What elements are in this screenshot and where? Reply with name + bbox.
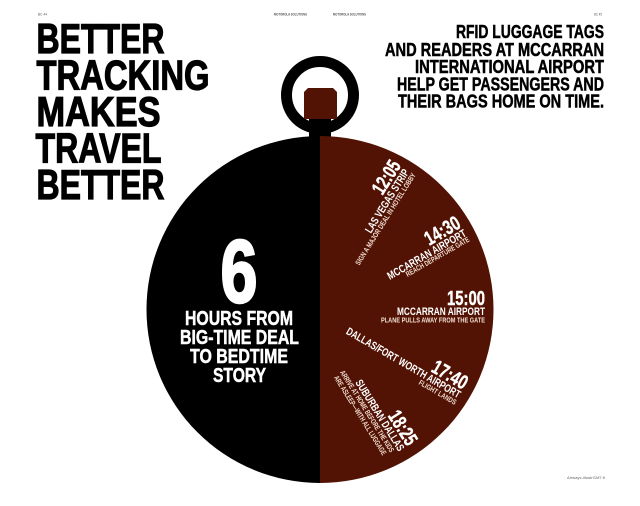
event 18:25: SUBURBAN DALLAS bbox=[353, 378, 406, 454]
event 15:00: PLANE PULLS AWAY FROM THE GATE bbox=[381, 316, 485, 324]
page header: BC 44 bbox=[38, 12, 47, 16]
stopwatch crown bbox=[304, 88, 337, 119]
callout text: STORY bbox=[213, 365, 267, 387]
subtitle: INTERNATIONAL AIRPORT bbox=[415, 57, 604, 77]
event 18:25 bbox=[332, 369, 421, 457]
callout text bbox=[180, 308, 299, 387]
callout text: HOURS FROM bbox=[185, 308, 293, 330]
event 12:05: LAS VEGAS STRIP bbox=[363, 167, 412, 235]
page header bbox=[38, 12, 602, 16]
event 14:30: 14:30 bbox=[421, 212, 464, 250]
title: TRACKING bbox=[36, 52, 210, 98]
callout text: BIG-TIME DEAL bbox=[180, 327, 299, 349]
event 15:00 bbox=[381, 288, 485, 324]
event 12:05 bbox=[353, 156, 418, 267]
event 18:25: 18:25 bbox=[383, 407, 421, 450]
subtitle bbox=[385, 22, 604, 112]
event 18:25: ARRIVE AT HOME BEFORE THE KIDS bbox=[338, 369, 396, 454]
title: MAKES bbox=[36, 88, 160, 135]
title: TRAVEL bbox=[36, 124, 162, 172]
event 14:30: MCCARRAN AIRPORT bbox=[385, 228, 469, 283]
stopwatch ring bbox=[286, 62, 354, 128]
six hours callout bbox=[180, 221, 299, 387]
stopwatch bbox=[146, 62, 494, 483]
page header: MOTOROLA SOLUTIONS bbox=[274, 12, 308, 16]
stopwatch stem bbox=[309, 117, 331, 141]
event 17:40: DALLAS/FORT WORTH AIRPORT bbox=[344, 326, 463, 401]
event 12:05: SIGN A MAJOR DEAL IN HOTEL LOBBY bbox=[353, 171, 418, 267]
title bbox=[36, 15, 210, 208]
dial left half bbox=[146, 136, 320, 483]
photo credit: Airways.iIlustrGM7.fi bbox=[567, 476, 605, 480]
event 15:00: MCCARRAN AIRPORT bbox=[397, 306, 485, 318]
event 15:00: 15:00 bbox=[447, 288, 485, 310]
title: BETTER bbox=[36, 161, 164, 208]
page header: BC 45 bbox=[594, 12, 602, 16]
event 17:40: FLIGHT LANDS bbox=[417, 378, 458, 407]
page header: MOTOROLA SOLUTIONS bbox=[333, 12, 367, 16]
callout text: TO BEDTIME bbox=[190, 346, 288, 368]
title: BETTER bbox=[36, 15, 164, 62]
dial right half bbox=[320, 136, 494, 483]
event 12:05: 12:05 bbox=[368, 156, 406, 199]
big number: 6 bbox=[220, 221, 258, 321]
event 17:40: 17:40 bbox=[428, 356, 472, 394]
event 14:30: REACH DEPARTURE GATE bbox=[404, 235, 471, 279]
event 18:25: ARE ASLEEP—WITH ALL LUGGAGE bbox=[332, 374, 388, 457]
event 17:40 bbox=[344, 326, 472, 407]
